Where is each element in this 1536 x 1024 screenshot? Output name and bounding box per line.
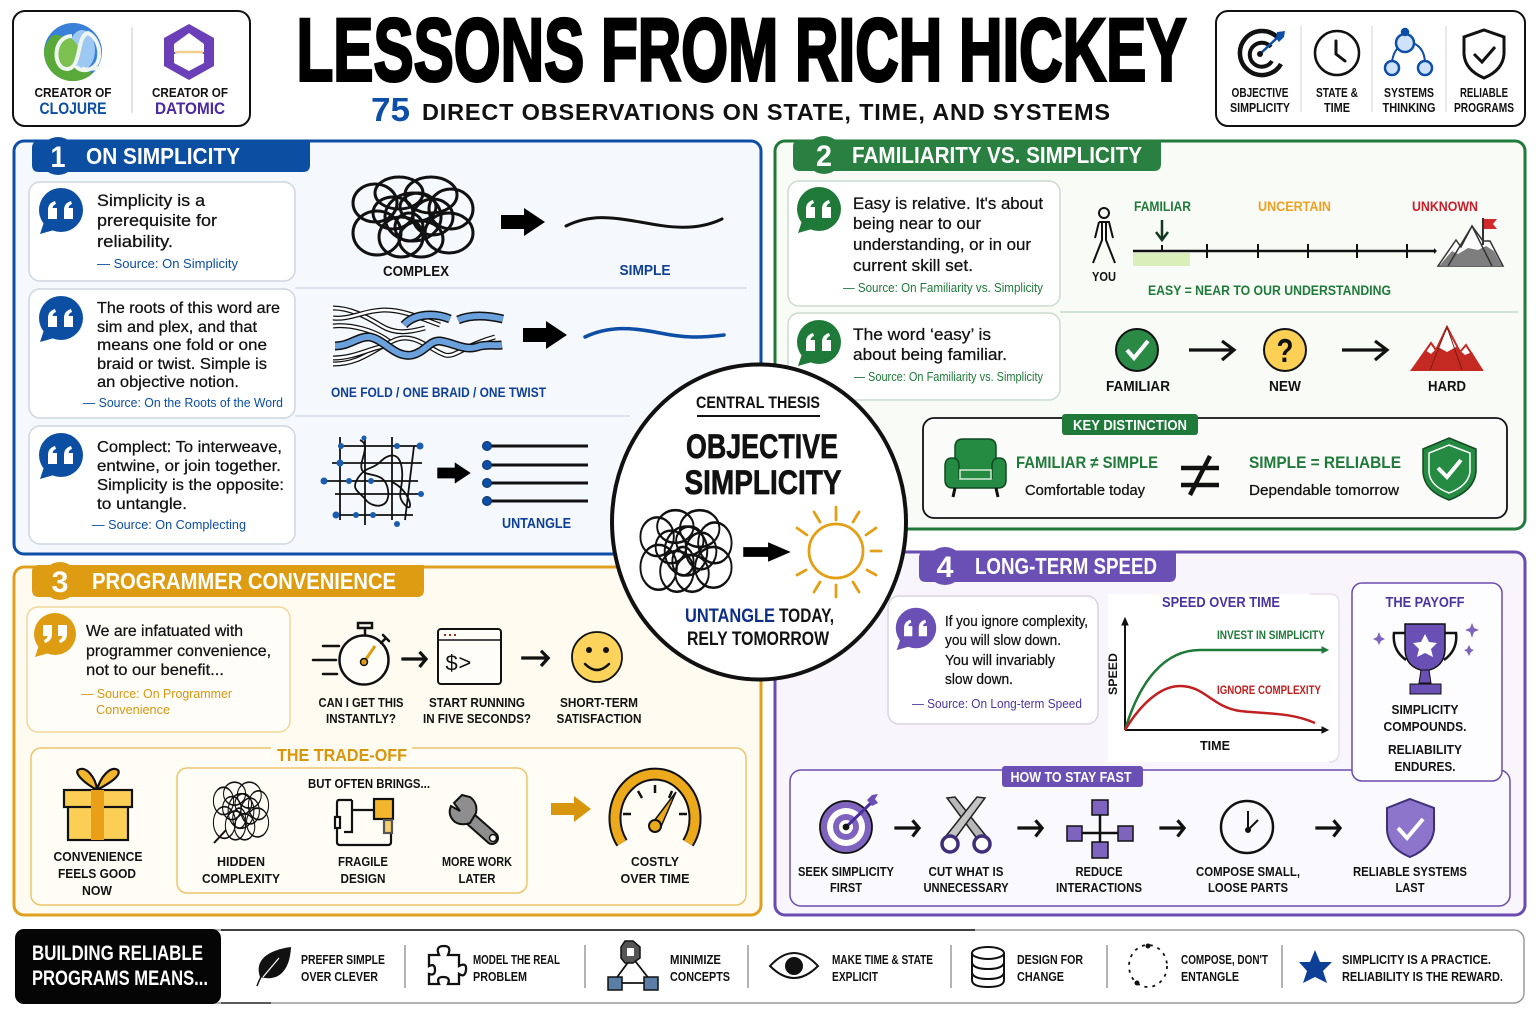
item: minimize concepts: MINIMIZE	[670, 953, 721, 967]
heading	[32, 137, 310, 175]
item: minimize concepts	[608, 941, 730, 990]
trade-off box: CONVENIENCE	[54, 849, 143, 864]
panel 4: long-term speed	[775, 547, 1525, 915]
icon: summit with flag	[1438, 218, 1503, 266]
diagram: complected grid to untangled lines: UNTANGLE	[502, 516, 571, 532]
icon: red mountain	[1412, 327, 1482, 370]
panel 1: on simplicity	[14, 137, 761, 554]
key distinction box	[923, 414, 1507, 518]
icon: armchair	[945, 439, 1006, 497]
familiarity timeline	[1092, 199, 1503, 298]
quote card 2	[788, 313, 1060, 400]
labels: themes: SIMPLICITY	[1230, 101, 1291, 115]
subtitle: 75	[371, 91, 410, 128]
label: creator of Datomic	[152, 85, 228, 118]
central thesis circle	[612, 364, 906, 680]
diagram: instant gratification flow: START RUNNING	[429, 695, 525, 710]
icon: systems nodes	[1385, 29, 1432, 75]
how to stay fast box: LAST	[1396, 880, 1425, 895]
diagram: instant gratification flow	[313, 623, 642, 726]
label: creator of Clojure: CREATOR OF	[34, 85, 112, 100]
chart: speed over time: TIME	[1200, 738, 1230, 753]
item: star: SIMPLICITY IS A PRACTICE.	[1342, 953, 1491, 967]
item: dashed circle: COMPOSE, DON'T	[1181, 953, 1268, 967]
quote card 1: Easy is relative. It's about	[853, 195, 1043, 213]
payoff card: ENDURES.	[1394, 759, 1456, 774]
label: creator of Datomic: DATOMIC	[155, 100, 225, 118]
item: eye: MAKE TIME & STATE	[832, 953, 933, 967]
icon: clock	[1221, 801, 1273, 853]
chart: speed over time: INVEST IN SIMPLICITY	[1217, 628, 1325, 642]
diagram: braid to single strand: ONE FOLD / ONE BRAID / ONE TWIST	[331, 384, 546, 400]
quote card 1: prerequisite for	[97, 211, 217, 230]
label: creator of Datomic: CREATOR OF	[152, 85, 228, 100]
how to stay fast box: LOOSE PARTS	[1208, 880, 1288, 895]
diagram: instant gratification flow: CAN I GET THIS	[318, 695, 404, 710]
icon: purple shield	[1387, 799, 1434, 857]
quote card: you will slow down.	[945, 632, 1061, 649]
chart: speed over time	[1106, 594, 1339, 762]
but often brings box	[177, 768, 527, 893]
quote card 1	[788, 181, 1060, 306]
quote card 3: — Source: On Complecting	[92, 518, 246, 532]
key distinction box: KEY DISTINCTION	[1073, 417, 1187, 434]
central thesis circle: TODAY,	[779, 606, 834, 627]
heading: FAMILIARITY VS. SIMPLICITY	[852, 142, 1142, 168]
payoff card: THE PAYOFF	[1386, 594, 1464, 611]
trade-off box: NOW	[82, 883, 113, 898]
key distinction box: Dependable tomorrow	[1249, 483, 1400, 499]
icon: sun	[797, 507, 881, 597]
quote card 2: sim and plex, and that	[97, 319, 258, 336]
item: leaf: OVER CLEVER	[301, 970, 378, 984]
quote card 1: — Source: On Familiarity vs. Simplicity	[843, 281, 1044, 295]
quote card 1	[29, 182, 295, 281]
labels: themes: RELIABLE	[1460, 86, 1508, 100]
icon: shield check	[1464, 30, 1504, 78]
icon: fragile circuit	[335, 799, 393, 845]
item: puzzle: MODEL THE REAL	[473, 953, 560, 967]
central thesis circle: UNTANGLE	[685, 606, 775, 627]
subtitle: DIRECT OBSERVATIONS ON STATE, TIME, AND SYSTEMS	[422, 99, 1110, 125]
how to stay fast box: REDUCE	[1076, 864, 1123, 879]
icon: reduced network	[1067, 800, 1133, 858]
quote card 2: braid or twist. Simple is	[97, 356, 267, 373]
icon: wrench	[450, 795, 496, 842]
item: leaf: PREFER SIMPLE	[301, 953, 385, 967]
how to stay fast box: HOW TO STAY FAST	[1010, 770, 1132, 786]
quote card 2: an objective notion.	[97, 374, 239, 391]
bottom strip	[15, 929, 1524, 1004]
quote card 2: The roots of this word are	[97, 300, 280, 317]
heading: PROGRAMMER CONVENIENCE	[92, 568, 396, 594]
but often brings box: HIDDEN	[217, 854, 265, 869]
heading	[793, 136, 1161, 174]
chart: speed over time: IGNORE COMPLEXITY	[1217, 683, 1321, 697]
payoff card: RELIABILITY	[1388, 742, 1462, 757]
quote card	[888, 596, 1098, 724]
quote card: You will invariably	[945, 652, 1055, 669]
quote card 1: understanding, or in our	[853, 236, 1032, 254]
trade-off box: COSTLY	[631, 854, 679, 869]
labels: themes: PROGRAMS	[1454, 101, 1514, 115]
header: creators card	[13, 11, 250, 126]
how to stay fast box	[790, 766, 1510, 906]
diagram: familiar new hard	[1106, 327, 1482, 395]
trade-off box: FEELS GOOD	[58, 866, 136, 881]
heading: 2	[816, 140, 832, 173]
item: eye	[770, 953, 933, 984]
how to stay fast box: COMPOSE SMALL,	[1196, 864, 1300, 879]
but often brings box: DESIGN	[340, 871, 386, 886]
quote card 1: — Source: On Simplicity	[97, 257, 239, 271]
icon: person	[1093, 208, 1115, 263]
quote card: If you ignore complexity,	[945, 613, 1088, 630]
key distinction box: SIMPLE = RELIABLE	[1249, 453, 1401, 472]
label: creator of Clojure: CLOJURE	[40, 100, 106, 118]
header: themes card	[1216, 11, 1525, 126]
icon: Datomic logo	[164, 24, 214, 80]
how to stay fast box: SEEK SIMPLICITY	[798, 864, 894, 879]
icon: target	[1240, 31, 1285, 75]
key distinction box: FAMILIAR ≠ SIMPLE	[1016, 453, 1158, 472]
quote card: not to our benefit...	[86, 662, 224, 679]
heading: LONG-TERM SPEED	[975, 553, 1157, 579]
central thesis circle: CENTRAL THESIS	[696, 393, 820, 412]
payoff card: COMPOUNDS.	[1384, 719, 1466, 734]
icon: clock	[1315, 31, 1359, 75]
subtitle	[371, 91, 1110, 128]
quote card 1: being near to our	[853, 215, 982, 233]
item: puzzle: PROBLEM	[473, 970, 527, 984]
labels: themes: THINKING	[1382, 101, 1436, 115]
item: star	[1299, 950, 1503, 984]
quote card 1: Simplicity is a	[97, 191, 206, 210]
how to stay fast box: INTERACTIONS	[1056, 880, 1142, 895]
icon: gift	[64, 769, 132, 840]
item: star: RELIABILITY IS THE REWARD.	[1342, 970, 1503, 984]
quote card: — Source: On Long-term Speed	[912, 697, 1082, 711]
chart: speed over time: SPEED OVER TIME	[1162, 594, 1280, 611]
payoff card	[1352, 583, 1502, 781]
quote card: Convenience	[96, 703, 170, 717]
heading	[919, 547, 1176, 585]
quote card 2: means one fold or one	[97, 337, 267, 354]
item: database: CHANGE	[1017, 970, 1064, 984]
labels: themes: TIME	[1324, 101, 1350, 115]
panel 3: programmer convenience	[14, 562, 761, 915]
item: eye: EXPLICIT	[832, 970, 878, 984]
label: creator of Clojure	[34, 85, 112, 118]
but often brings box: MORE WORK	[442, 854, 513, 869]
how to stay fast box: UNNECESSARY	[924, 880, 1009, 895]
familiarity timeline: FAMILIAR	[1134, 199, 1191, 214]
quote card: — Source: On Programmer	[81, 687, 232, 701]
trade-off box: THE TRADE-OFF	[277, 745, 407, 765]
icon: stopwatch	[313, 623, 389, 684]
key distinction box: Comfortable today	[1025, 483, 1146, 499]
diagram: complex to simple	[353, 177, 722, 280]
quote card 1: reliability.	[97, 232, 173, 251]
heading: building reliable programs: PROGRAMS MEANS...	[32, 967, 208, 990]
quote card 3: to untangle.	[97, 496, 187, 513]
labels: themes: STATE &	[1316, 86, 1358, 100]
quote card 2: — Source: On Familiarity vs. Simplicity	[854, 370, 1044, 384]
icon: scissors	[942, 797, 990, 852]
quote card: We are infatuated with	[86, 623, 243, 640]
trade-off box: OVER TIME	[620, 871, 690, 886]
how to stay fast box: RELIABLE SYSTEMS	[1353, 864, 1467, 879]
quote card 3: entwine, or join together.	[97, 458, 281, 475]
icon: trophy	[1373, 623, 1479, 694]
quote card 2: The word ‘easy’ is	[853, 326, 991, 344]
item: leaf	[257, 947, 385, 986]
quote card	[27, 607, 290, 732]
quote card 2: — Source: On the Roots of the Word	[83, 396, 283, 410]
item: database	[972, 947, 1083, 987]
icon: target	[820, 794, 878, 853]
diagram: braid to single strand	[331, 308, 724, 400]
heading: 3	[52, 566, 68, 599]
quote card: programmer convenience,	[86, 643, 271, 660]
familiarity timeline: YOU	[1092, 270, 1116, 284]
item: puzzle	[429, 946, 560, 984]
diagram: instant gratification flow: IN FIVE SECONDS?	[423, 711, 531, 726]
chart: speed over time: SPEED	[1106, 653, 1120, 695]
but often brings box: BUT OFTEN BRINGS...	[308, 776, 430, 791]
quote card: slow down.	[945, 671, 1013, 688]
quote card 1: current skill set.	[853, 257, 973, 275]
quote card 3: Complect: To interweave,	[97, 439, 282, 456]
labels: themes: SYSTEMS	[1384, 86, 1434, 100]
diagram: complex to simple: SIMPLE	[620, 263, 671, 279]
item: minimize concepts: CONCEPTS	[670, 970, 730, 984]
icon: terminal window: $>	[445, 652, 471, 677]
heading: 1	[50, 141, 66, 174]
central thesis circle: RELY TOMORROW	[687, 629, 829, 650]
trade-off box	[31, 742, 746, 905]
diagram: instant gratification flow: SHORT-TERM	[560, 695, 638, 710]
item: dashed circle: ENTANGLE	[1181, 970, 1239, 984]
diagram: familiar new hard: ?	[1276, 332, 1294, 369]
but often brings box: FRAGILE	[338, 854, 388, 869]
quote card 3: Simplicity is the opposite:	[97, 477, 284, 494]
heading: ON SIMPLICITY	[86, 143, 240, 169]
icon: terminal window	[438, 629, 501, 684]
familiarity timeline: EASY = NEAR TO OUR UNDERSTANDING	[1148, 283, 1391, 298]
diagram: complex to simple: COMPLEX	[383, 264, 449, 280]
heading: building reliable programs: BUILDING RELIABLE	[32, 942, 203, 965]
diagram: familiar new hard: FAMILIAR	[1106, 379, 1170, 395]
icon: gauge	[615, 774, 695, 843]
how to stay fast box: FIRST	[830, 880, 862, 895]
diagram: complected grid to untangled lines	[320, 436, 588, 532]
diagram: familiar new hard: NEW	[1269, 379, 1301, 395]
diagram: instant gratification flow: INSTANTLY?	[326, 711, 396, 726]
how to stay fast box: CUT WHAT IS	[928, 864, 1004, 879]
labels: themes: OBJECTIVE	[1232, 86, 1288, 100]
familiarity timeline: UNCERTAIN	[1258, 199, 1331, 214]
central thesis circle: OBJECTIVE	[686, 428, 838, 466]
icon: green shield	[1423, 438, 1476, 500]
diagram: instant gratification flow: SATISFACTION	[556, 711, 642, 726]
heading: 4	[936, 551, 954, 584]
arrow	[551, 796, 591, 822]
quote card 2	[29, 289, 295, 418]
familiarity timeline: UNKNOWN	[1412, 199, 1478, 214]
payoff card: SIMPLICITY	[1392, 702, 1459, 717]
heading: building reliable programs	[15, 929, 221, 1004]
item: database: DESIGN FOR	[1017, 953, 1083, 967]
diagram: familiar new hard: HARD	[1428, 379, 1466, 395]
quote card 3	[29, 426, 295, 544]
panel 2: familiarity vs simplicity	[775, 136, 1525, 529]
quote card 2: about being familiar.	[853, 346, 1007, 364]
but often brings box: COMPLEXITY	[202, 871, 280, 886]
icon: smiley	[572, 632, 622, 682]
heading	[32, 562, 424, 600]
item: dashed circle	[1129, 944, 1268, 987]
icon: Clojure logo	[44, 23, 102, 81]
central thesis circle: SIMPLICITY	[684, 464, 842, 502]
labels: themes	[1230, 86, 1514, 115]
but often brings box: LATER	[458, 871, 496, 886]
